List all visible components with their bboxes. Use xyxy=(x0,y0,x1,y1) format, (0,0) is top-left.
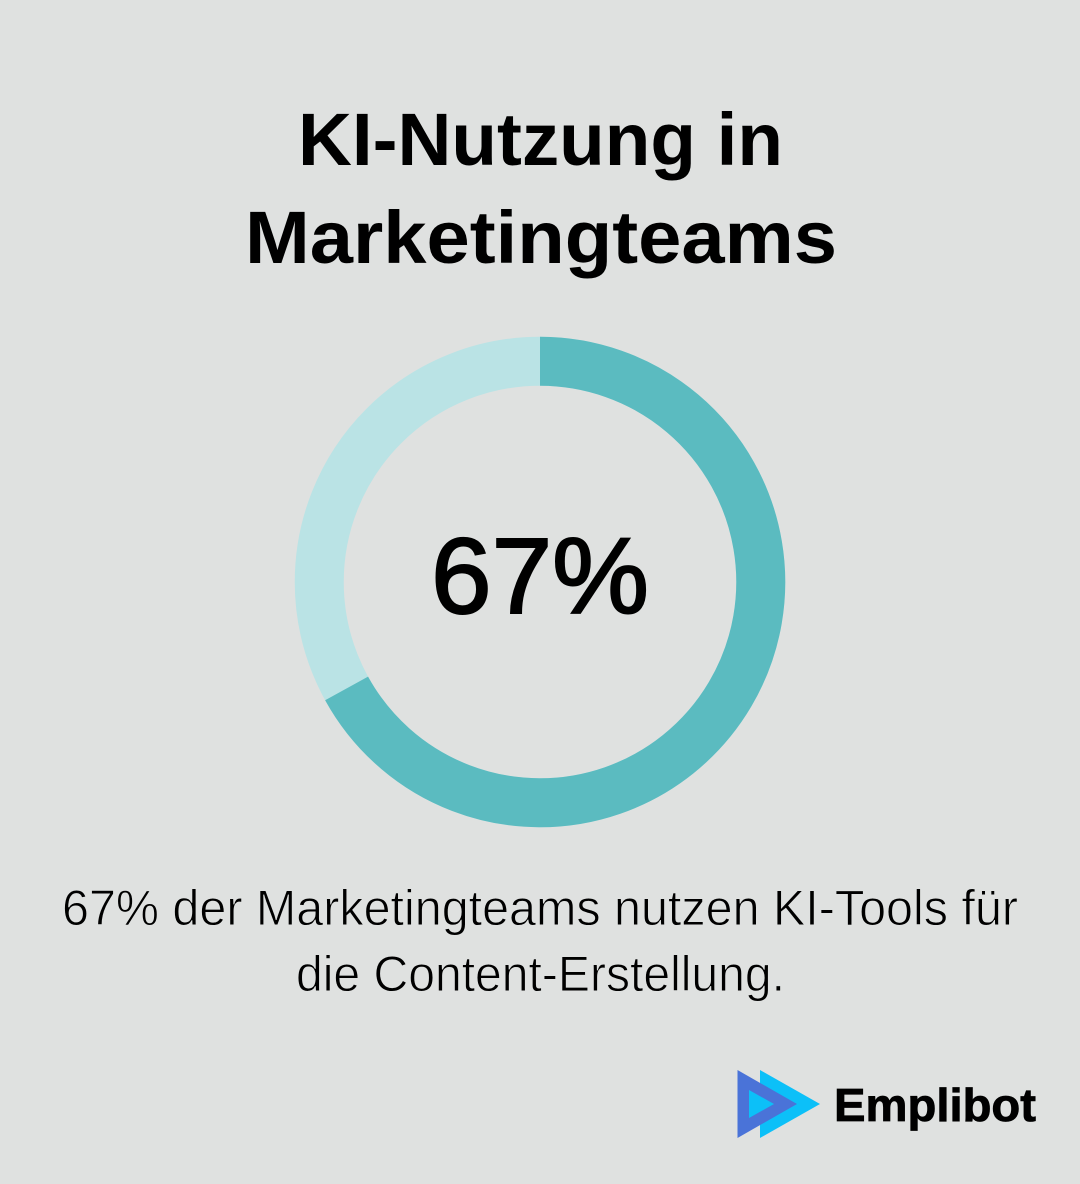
title: KI-Nutzung in xyxy=(298,98,783,181)
description: 67% der Marketingteams nutzen KI-Tools für xyxy=(62,880,1018,936)
wordmark: Emplibot xyxy=(834,1079,1036,1131)
title: Marketingteams xyxy=(245,196,837,279)
donut chart: 67% xyxy=(319,361,761,803)
center value: 67% xyxy=(431,515,649,636)
icon: play triangles xyxy=(738,1070,820,1138)
title xyxy=(245,98,837,279)
description: die Content-Erstellung. xyxy=(296,946,785,1002)
description xyxy=(62,880,1018,1002)
logo: Emplibot xyxy=(738,1070,1036,1138)
